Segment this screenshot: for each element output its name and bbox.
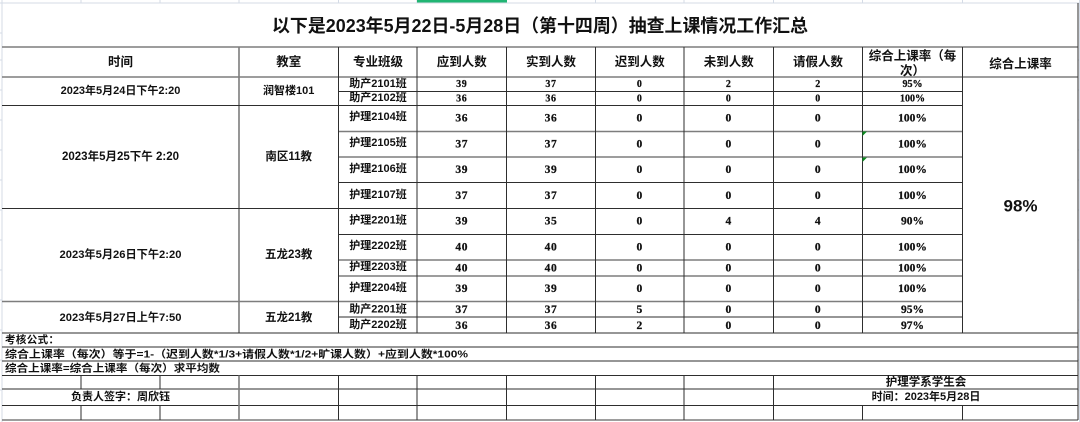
issuing organisation and date [872, 374, 980, 403]
expected attendance column: 39 [455, 164, 468, 176]
assessment formula notes [5, 333, 469, 374]
attendance rate per session column: 100% [900, 94, 925, 104]
classroom column: 南区11教 [265, 149, 313, 163]
assessment formula notes: 综合上课率（每次）等于=1-（迟到人数*1/3+请假人数*1/2+旷课人数）+应到人数*100% [5, 348, 469, 360]
overall attendance rate: 98% [1003, 196, 1038, 216]
expected attendance column: 39 [455, 283, 468, 295]
header row: 迟到人数 [615, 54, 665, 69]
attendance rate per session column: 100% [898, 262, 927, 274]
class names column: 助产2201班 [349, 302, 407, 316]
actual attendance column: 40 [545, 242, 557, 254]
class names column: 助产2101班 [349, 76, 407, 90]
class names column: 助产2102班 [349, 90, 407, 104]
late count column: 0 [637, 79, 643, 90]
actual attendance column: 37 [545, 79, 557, 90]
late count column: 0 [637, 242, 643, 254]
time column: 2023年5月26日下午2:20 [60, 247, 181, 261]
class names column: 护理2203班 [349, 259, 407, 273]
absent count column: 0 [726, 112, 732, 124]
actual attendance column: 39 [545, 164, 557, 176]
actual attendance column: 36 [545, 112, 557, 124]
late count column: 0 [637, 94, 643, 104]
leave count column: 0 [815, 94, 821, 104]
leave count column: 0 [815, 320, 821, 332]
class names column [349, 76, 407, 331]
leave count column: 2 [815, 79, 821, 90]
header row: 综合上课率（每 [869, 48, 957, 63]
expected attendance column: 36 [456, 94, 467, 104]
late count column: 0 [637, 138, 643, 150]
expected attendance column: 37 [455, 190, 468, 202]
classroom column: 五龙21教 [265, 310, 313, 324]
late count column: 0 [637, 112, 643, 124]
header row [108, 48, 1052, 78]
green cell markers [862, 132, 867, 162]
header row: 专业班级 [353, 54, 403, 69]
attendance rate per session column: 100% [898, 138, 927, 150]
expected attendance column: 40 [455, 262, 468, 274]
assessment formula notes: 考核公式： [5, 333, 59, 346]
late count column [637, 79, 643, 332]
expected attendance column: 40 [455, 242, 468, 254]
actual attendance column: 35 [545, 216, 557, 228]
attendance rate per session column: 100% [898, 283, 927, 295]
absent count column: 4 [726, 216, 732, 228]
late count column: 0 [637, 164, 643, 176]
issuing organisation and date: 护理学系学生会 [886, 374, 967, 388]
actual attendance column: 37 [545, 138, 557, 150]
attendance rate per session column [898, 79, 927, 332]
attendance rate per session column: 95% [901, 304, 924, 316]
class names column: 护理2106班 [349, 161, 407, 175]
attendance rate per session column: 100% [898, 190, 927, 202]
absent count column: 0 [726, 138, 732, 150]
attendance rate per session column: 90% [901, 216, 924, 228]
classroom column: 五龙23教 [265, 247, 313, 261]
header row: 时间 [108, 55, 133, 69]
actual attendance column: 36 [545, 320, 557, 332]
attendance rate per session column: 100% [898, 112, 927, 124]
expected attendance column: 36 [455, 320, 468, 332]
assessment formula notes: 综合上课率=综合上课率（每次）求平均数 [5, 362, 221, 374]
classroom column [263, 83, 314, 324]
header row: 未到人数 [704, 54, 754, 69]
expected attendance column [455, 79, 468, 332]
leave count column: 0 [815, 242, 821, 254]
late count column: 5 [637, 304, 643, 316]
header row: 应到人数 [437, 54, 487, 69]
late count column: 0 [637, 216, 643, 228]
actual attendance column [545, 79, 557, 332]
actual attendance column: 37 [545, 190, 557, 202]
attendance rate per session column: 100% [898, 242, 927, 254]
header row: 综合上课率 [989, 56, 1052, 71]
attendance rate per session column: 95% [902, 79, 922, 90]
absent count column: 0 [726, 262, 732, 274]
leave count column: 0 [815, 283, 821, 295]
absent count column: 0 [726, 304, 732, 316]
time column [60, 83, 181, 324]
title: 以下是2023年5月22日-5月28日（第十四周）抽查上课情况工作汇总 [272, 15, 808, 36]
absent count column: 0 [726, 190, 732, 202]
class names column: 护理2201班 [349, 212, 407, 226]
absent count column: 0 [726, 94, 732, 104]
header row: 实到人数 [526, 54, 576, 69]
late count column: 0 [637, 262, 643, 274]
time column: 2023年5月24日下午2:20 [61, 83, 180, 97]
header row: 请假人数 [793, 54, 843, 69]
class names column: 护理2202班 [349, 238, 407, 252]
leave count column: 0 [815, 304, 821, 316]
class names column: 护理2204班 [349, 280, 407, 294]
absent count column: 0 [726, 320, 732, 332]
leave count column: 0 [815, 164, 821, 176]
absent count column: 0 [726, 164, 732, 176]
absent count column: 0 [726, 242, 732, 254]
leave count column [815, 79, 821, 332]
expected attendance column: 39 [456, 79, 467, 90]
time column: 2023年5月25下午 2:20 [62, 149, 179, 163]
actual attendance column: 39 [545, 283, 557, 295]
expected attendance column: 36 [455, 112, 468, 124]
time column: 2023年5月27日上午7:50 [60, 310, 181, 324]
leave count column: 0 [815, 262, 821, 274]
signature: 负责人签字：周欣钰 [71, 389, 170, 403]
issuing organisation and date: 时间：2023年5月28日 [872, 389, 980, 403]
header row: 教室 [276, 54, 301, 69]
classroom column: 润智楼101 [263, 83, 314, 97]
expected attendance column: 37 [455, 138, 468, 150]
expected attendance column: 39 [455, 216, 468, 228]
attendance rate per session column: 100% [898, 164, 927, 176]
late count column: 2 [637, 320, 643, 332]
late count column: 0 [637, 283, 643, 295]
class names column: 护理2107班 [349, 187, 407, 201]
header row: 次） [900, 63, 925, 78]
expected attendance column: 37 [455, 304, 468, 316]
late count column: 0 [637, 190, 643, 202]
absent count column: 2 [726, 79, 732, 90]
class names column: 护理2104班 [349, 109, 407, 123]
class names column: 护理2105班 [349, 135, 407, 149]
leave count column: 0 [815, 138, 821, 150]
class names column: 助产2202班 [349, 317, 407, 331]
absent count column: 0 [726, 283, 732, 295]
attendance rate per session column: 97% [901, 320, 924, 332]
leave count column: 0 [815, 190, 821, 202]
actual attendance column: 40 [545, 262, 557, 274]
leave count column: 0 [815, 112, 821, 124]
actual attendance column: 36 [545, 94, 557, 104]
leave count column: 4 [815, 216, 821, 228]
absent count column [726, 79, 732, 332]
actual attendance column: 37 [545, 304, 557, 316]
